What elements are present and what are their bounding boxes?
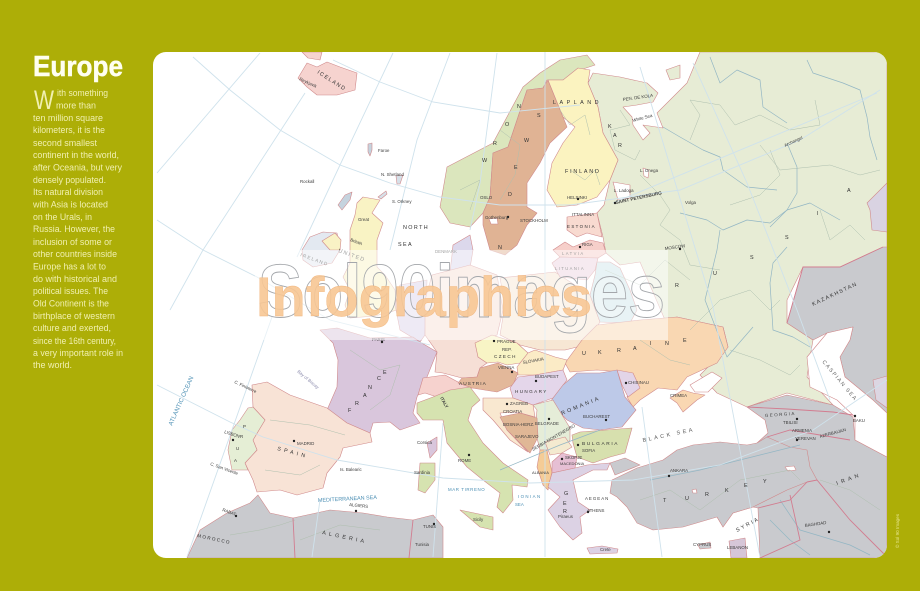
Switzerland — [418, 375, 472, 397]
city dots — [232, 198, 856, 533]
map labels: KAZAKHSTAN — [811, 281, 859, 308]
graticule — [157, 52, 887, 557]
watermark outline wordmark: Sol90images — [258, 249, 665, 333]
Atlantic Ocean label: ATLANTIC OCEAN — [167, 375, 195, 427]
Turkey — [610, 437, 817, 530]
map labels: RABAT — [222, 507, 237, 517]
map labels: ROMANIA — [561, 396, 602, 417]
map labels: A — [847, 188, 852, 194]
map labels: I — [817, 211, 820, 217]
map labels: SEA — [515, 502, 524, 507]
map labels: CRIMEA — [670, 393, 687, 398]
map labels: S — [537, 113, 542, 119]
map labels: N — [498, 245, 503, 251]
map labels: R — [240, 434, 245, 439]
map labels: ARMENIA — [792, 428, 812, 433]
Urals patch — [867, 183, 887, 232]
map labels: Sardinia — [414, 470, 431, 475]
rivers — [500, 57, 877, 555]
Lake Tuz — [692, 489, 697, 493]
map labels: ALBANIA — [532, 470, 549, 475]
map labels: Volga — [685, 200, 697, 205]
Benelux — [395, 280, 427, 342]
intro text block: second smallest — [33, 138, 97, 148]
Albania — [537, 450, 552, 490]
map labels: MACEDONIA — [560, 461, 585, 466]
map labels: NORTH — [403, 225, 429, 231]
map labels: U — [713, 271, 718, 277]
map labels: ZAGREB — [510, 401, 528, 406]
map labels: AUSTRIA — [459, 381, 487, 387]
map labels: GEORGIA — [765, 411, 796, 418]
Lake Ladoga — [613, 182, 630, 200]
Czech Republic — [475, 335, 528, 365]
map labels: Crete — [600, 547, 611, 552]
intro text block: on the Urals, in — [33, 212, 92, 222]
map labels: UNITED — [337, 248, 366, 264]
Spain — [245, 382, 372, 495]
map labels: R — [355, 401, 360, 407]
intro text block: kilometers, it is the — [33, 125, 105, 135]
Caspian Sea — [807, 327, 887, 457]
map labels: BUCHAREST — [583, 414, 610, 419]
Finland — [547, 68, 618, 207]
map labels: C. San Vicente — [210, 461, 239, 476]
intro text block: do with historical and — [33, 274, 117, 284]
map labels: F — [348, 408, 353, 414]
map labels: BULGARIA — [582, 441, 619, 447]
map labels: K — [608, 124, 613, 130]
watermark backing box — [255, 250, 668, 340]
intro text block: since the 16th century, — [33, 336, 116, 346]
Lake Van — [785, 466, 796, 471]
map labels: A — [633, 346, 638, 352]
map labels: AEGEAN — [585, 496, 609, 501]
map labels: O — [505, 122, 511, 128]
Northern Ireland — [322, 233, 341, 250]
Iceland — [298, 62, 357, 95]
Ireland — [302, 232, 340, 267]
map labels: HELSINKI — [567, 195, 587, 200]
Macedonia — [552, 453, 577, 473]
map labels: U — [582, 351, 587, 357]
map labels: Reykjavik — [299, 76, 318, 89]
map labels: BOSNIA-HERZ. — [503, 422, 534, 427]
map labels: R — [705, 492, 710, 498]
Thrace — [610, 458, 640, 475]
map labels: P — [243, 424, 247, 429]
intro text block: Europe has a lot to — [33, 262, 106, 272]
Greenland fragment — [302, 52, 322, 60]
copyright note: © Sol 90 Images — [894, 513, 900, 548]
map labels: LEBANON — [727, 545, 748, 550]
Shetland — [396, 175, 403, 184]
intro text block: more than — [56, 100, 96, 110]
Lake Vanern — [489, 218, 498, 224]
map labels: Gothenburg — [485, 215, 509, 220]
map labels: ATHENS — [587, 508, 605, 513]
map labels: SLOVAKIA — [522, 356, 544, 365]
land masses — [187, 52, 887, 558]
international borders on grey land — [293, 247, 885, 558]
map labels: Is. Balearic — [340, 467, 363, 472]
map labels: LISBON — [224, 429, 241, 439]
intro text block: ith something — [57, 88, 108, 98]
Greece — [548, 463, 610, 540]
map labels: BAKU — [853, 418, 865, 423]
map labels: SOFIA — [582, 448, 595, 453]
Tyrrhenian Sea label: MAR TIRRENO — [448, 487, 485, 492]
Croatia — [483, 398, 535, 452]
map labels: SYRIA — [735, 516, 761, 534]
map labels: K — [598, 350, 603, 356]
Ukraine — [565, 317, 728, 407]
map labels: Faroe — [378, 148, 390, 153]
Crete — [587, 546, 618, 554]
map labels: LATVIA — [562, 251, 585, 256]
map labels: CYPRUS — [693, 542, 711, 547]
Poland — [500, 272, 600, 350]
map labels: LAPLAND — [553, 100, 602, 106]
map labels: SEA — [398, 242, 413, 248]
map labels: CZECH — [494, 354, 517, 359]
map labels: E — [383, 370, 388, 376]
map labels: IRELAND — [300, 252, 329, 267]
Sardinia — [418, 463, 435, 493]
minor rivers — [230, 100, 880, 540]
Caucasus, Iran and Iraq — [717, 395, 887, 558]
Slovakia — [517, 350, 567, 375]
map labels: S. Orkney — [392, 199, 412, 204]
map labels: Corsica — [417, 440, 432, 445]
map labels: MOROCCO — [197, 533, 231, 545]
intro text block: Russia. However, the — [33, 224, 115, 234]
map labels: L. Ladoga — [614, 188, 634, 193]
Italy — [417, 387, 528, 513]
map labels: CASPIAN SEA — [820, 359, 858, 403]
map labels: STOCKHOLM — [520, 218, 548, 223]
map labels: Rockall — [300, 179, 314, 184]
map labels — [197, 70, 865, 552]
map labels: S — [785, 235, 790, 241]
Great Britain — [343, 197, 397, 318]
map labels: MOSCOW — [664, 243, 687, 251]
map labels: S — [750, 255, 755, 261]
intro text block: Its natural division — [33, 187, 103, 197]
Lithuania — [552, 257, 598, 280]
map labels: IONIAN — [518, 494, 542, 499]
map labels: R — [617, 348, 622, 354]
map labels: LITUANIA — [555, 266, 585, 271]
map labels: A — [363, 393, 368, 399]
map labels: ALGERIA — [322, 530, 368, 545]
map labels: ANKARA — [670, 468, 688, 473]
intro text block: inclusion of some or — [33, 237, 112, 247]
map labels: SKOPJE — [565, 455, 582, 460]
Levant — [729, 538, 747, 558]
Romania — [550, 370, 636, 430]
map labels: BLACK SEA — [642, 427, 696, 444]
map labels: L. Onega — [640, 168, 659, 173]
Russia — [588, 52, 887, 407]
map labels: Tunisia — [415, 542, 430, 547]
map labels: AZERBAIJAN — [819, 427, 846, 439]
intro text block: ten million square — [33, 113, 103, 123]
map labels: N — [517, 104, 522, 110]
map labels: IRAN — [836, 472, 863, 487]
Hungary — [510, 370, 567, 405]
intro text block: the world. — [33, 360, 72, 370]
Cyprus — [698, 542, 711, 549]
intro text block: Old Continent is the — [33, 298, 109, 308]
map labels: TUNIS — [423, 524, 436, 529]
map labels: R — [563, 509, 568, 515]
map labels: FINLAND — [565, 169, 601, 175]
map labels: A — [613, 133, 618, 139]
map labels: E — [514, 165, 519, 171]
Serbia — [533, 400, 570, 450]
intro text block — [32, 85, 123, 370]
Portugal — [228, 407, 265, 470]
map labels: ALGIERS — [349, 502, 368, 509]
intro text block: birthplace of western — [33, 311, 115, 321]
map labels: RIGA — [582, 242, 593, 247]
map labels: BAGHDAD — [804, 520, 827, 528]
Kazakhstan and central Asia — [787, 247, 887, 420]
map labels: R — [493, 141, 498, 147]
map labels: BUDAPEST — [535, 374, 559, 379]
map labels: BELGRADE — [535, 421, 559, 426]
Latvia — [553, 240, 606, 258]
map labels: Piraeus — [558, 514, 574, 519]
Sea of Azov — [690, 372, 722, 392]
map labels: ITALY — [439, 396, 449, 409]
map labels: W — [524, 138, 530, 144]
map labels: R — [675, 283, 680, 289]
Orkney — [378, 191, 387, 199]
Caucasus patch east of the Caspian — [873, 376, 887, 408]
Austria — [458, 363, 518, 392]
map labels: R — [618, 143, 623, 149]
Moldova — [617, 370, 640, 397]
intro text block: W — [34, 85, 54, 115]
map labels: Great — [358, 217, 370, 222]
title: Europe — [33, 51, 123, 83]
France — [320, 328, 437, 433]
map labels: I — [650, 341, 653, 347]
map labels: CHISINAU — [628, 380, 649, 385]
map labels: VIENNA — [498, 365, 514, 370]
intro text block: culture and exerted, — [33, 323, 111, 333]
Faroe Islands — [368, 143, 372, 156]
map labels: Sicily — [473, 517, 484, 522]
intro text block: with Asia is located — [32, 200, 108, 210]
Sicily — [460, 510, 493, 530]
Denmark — [450, 235, 473, 272]
map labels: E — [683, 338, 688, 344]
Montenegro and Kosovo — [545, 437, 572, 455]
Bosnia — [500, 413, 538, 453]
map labels: C. Finisterre — [234, 379, 258, 394]
map labels: N. Shetland — [381, 172, 405, 177]
map labels: ICELAND — [316, 70, 347, 93]
map labels: YEREVAN — [795, 436, 816, 441]
intro text block: other countries inside — [33, 249, 117, 259]
map labels: SARAJEVO — [515, 434, 539, 439]
map labels: W — [482, 158, 488, 164]
Germany — [425, 265, 503, 378]
map labels: REP. — [502, 347, 512, 352]
intro text block: densely populated. — [33, 175, 106, 185]
map labels: K — [725, 488, 730, 494]
intro text block: a very important role in — [33, 348, 123, 358]
Kanin peninsula — [666, 65, 680, 80]
map labels: Archangel — [783, 135, 803, 148]
Hebrides — [338, 192, 352, 210]
map labels: CROATIA — [503, 409, 522, 414]
map labels: E — [563, 501, 568, 507]
map labels: N — [368, 385, 373, 391]
map labels: OSLO — [480, 195, 493, 200]
Belarus — [590, 262, 637, 323]
map labels: C — [377, 376, 382, 382]
Norway — [440, 55, 595, 227]
map labels: T — [663, 498, 668, 504]
Mediterranean Sea label: MEDITERRANEAN SEA — [318, 495, 377, 504]
map labels: HUNGARY — [515, 389, 548, 394]
map labels: PARIS — [372, 337, 385, 342]
map labels: TBILISI — [783, 420, 798, 425]
map labels: SERBIA MONTENEGRO — [531, 423, 576, 452]
map labels: ESTONIA — [567, 224, 596, 229]
Bulgaria — [572, 428, 632, 463]
map labels: SPAIN — [276, 446, 309, 460]
map labels: U — [685, 496, 690, 502]
intro text block: after Oceania, but very — [33, 162, 122, 172]
watermark orange wordmark: Infographics — [256, 265, 592, 328]
intro text block: continent in the world, — [33, 150, 119, 160]
map labels: Britain — [350, 237, 364, 246]
map labels: PRAGUE — [497, 339, 516, 344]
Crimea — [670, 390, 705, 412]
map labels: U — [236, 446, 241, 451]
map labels: SAINT PETERSBURG — [615, 190, 663, 205]
map labels: ITTALINNA — [572, 212, 594, 217]
intro text block: political issues. The — [33, 286, 108, 296]
map labels: ROME — [458, 458, 471, 463]
map labels: Y — [763, 479, 768, 485]
map labels: Bay of Biscay — [296, 369, 321, 390]
map labels: D — [508, 192, 513, 198]
Sweden — [483, 80, 567, 255]
map labels: MADRID — [297, 441, 314, 446]
map panel — [153, 52, 887, 558]
Corsica — [427, 437, 437, 458]
Lake Onega — [643, 168, 649, 178]
map labels: PEN. DE KOLA — [622, 93, 653, 102]
map labels: White Sea — [632, 113, 653, 123]
map labels: E — [744, 483, 749, 489]
Estonia — [567, 213, 602, 237]
map labels: G — [564, 491, 570, 497]
map labels: DENMARK — [435, 249, 457, 254]
North Africa — [187, 495, 443, 558]
map labels: N — [665, 341, 670, 347]
map labels: A — [234, 458, 238, 463]
